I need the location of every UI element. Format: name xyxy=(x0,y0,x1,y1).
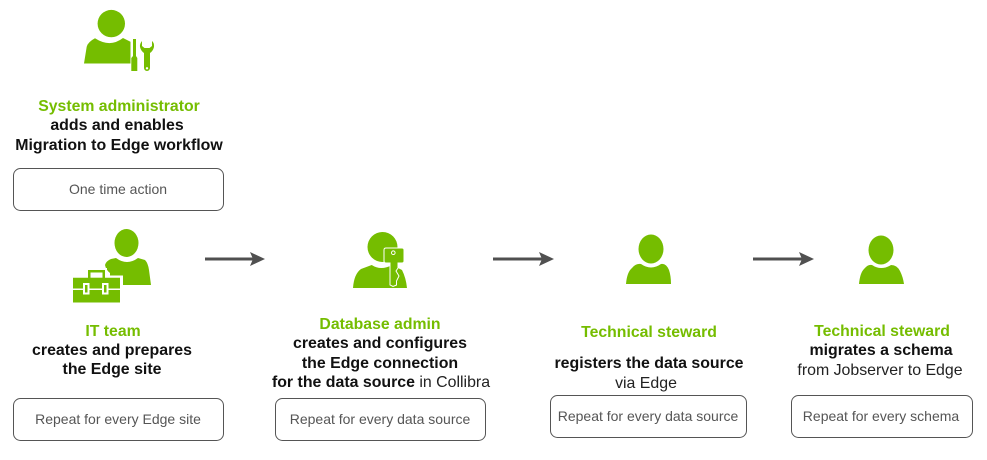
icon: person with toolbox xyxy=(70,229,151,305)
text: migrates a schema: migrates a schema xyxy=(809,342,953,359)
arrow: technical steward to technical steward xyxy=(753,252,814,266)
box: one time action: One time action xyxy=(69,181,167,197)
box: repeat for every schema: Repeat for every schema xyxy=(803,408,959,424)
arrow: IT team to database admin xyxy=(205,252,265,266)
text: migration to edge workflow: Migration to Edge workflow xyxy=(15,137,223,154)
heading: IT team: IT team xyxy=(85,323,141,340)
text: creates and prepares: creates and prepares xyxy=(32,342,192,359)
icon: administrator with tools xyxy=(84,10,154,71)
icon: person xyxy=(626,234,671,284)
text: for the data source in Collibra: for the data source in Collibra xyxy=(272,374,490,391)
icon: person xyxy=(859,236,904,284)
text: creates and configures: creates and configures xyxy=(293,335,467,352)
text: the edge site: the Edge site xyxy=(63,361,162,378)
heading: technical steward: Technical steward xyxy=(581,324,717,341)
text: the edge connection: the Edge connection xyxy=(302,355,458,372)
text: from jobserver to edge: from Jobserver to Edge xyxy=(797,362,963,379)
panel: technical steward migrates xyxy=(792,236,972,438)
heading: technical steward: Technical steward xyxy=(814,323,950,340)
heading: database admin: Database admin xyxy=(319,316,441,333)
box: repeat for every data source: Repeat for every data source xyxy=(558,408,738,424)
box: repeat for every data source xyxy=(550,396,746,438)
text: via edge: via Edge xyxy=(615,375,677,392)
text: registers the data source: registers the data source xyxy=(554,355,744,372)
box: repeat for every data source: Repeat for every data source xyxy=(290,411,470,427)
box: one time action xyxy=(14,168,224,210)
box: repeat for every data source xyxy=(276,398,486,440)
box: repeat for every schema xyxy=(792,396,972,438)
text: adds and enables: adds and enables xyxy=(50,117,184,134)
box: repeat for every edge site xyxy=(14,398,224,440)
panel: system administrator xyxy=(14,10,224,211)
panel: IT team xyxy=(14,229,224,440)
heading: system administrator: System administrator xyxy=(38,98,200,115)
icon: person with key xyxy=(353,232,407,288)
panel: technical steward registers xyxy=(550,234,746,438)
box: repeat for every edge site: Repeat for every Edge site xyxy=(35,411,201,427)
panel: database admin xyxy=(272,232,490,440)
arrow: database admin to technical steward xyxy=(493,252,554,266)
